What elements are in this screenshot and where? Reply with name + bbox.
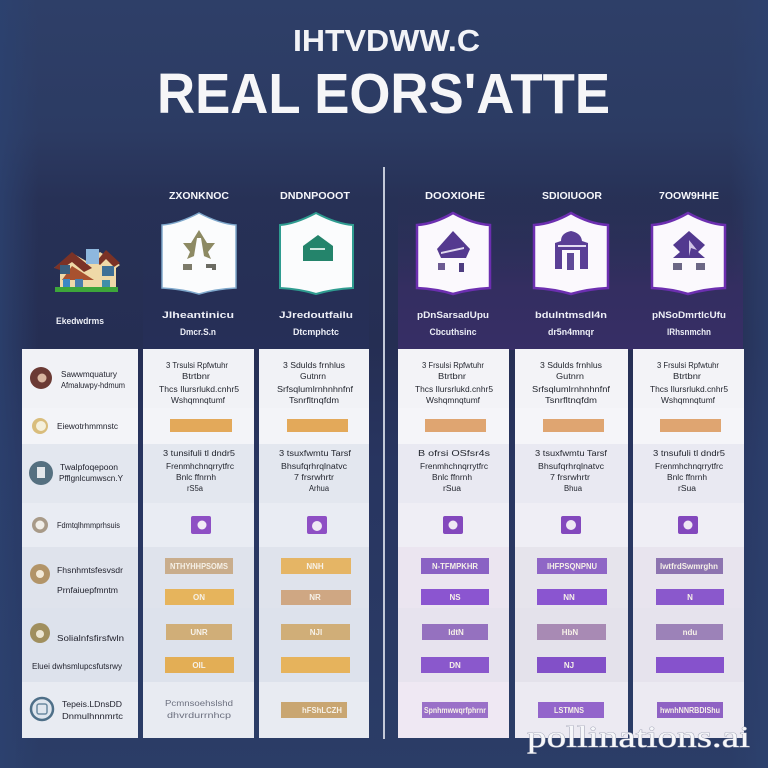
icon: purple shield temple [534, 213, 608, 294]
plan note: Dtcmphctc [293, 327, 339, 337]
row 1 text: Tsnrfltnqfdm [289, 396, 339, 405]
row 6 bars: NJI [310, 628, 322, 637]
column title: SDIOIUOOR [542, 191, 603, 202]
row 5 bars: lwtfrdSwmrghn [660, 562, 718, 571]
panel: column 4 [515, 349, 628, 738]
plan note: Cbcuthsinc [430, 327, 476, 337]
row 7 text: dhvrdurrnhcp [167, 711, 232, 720]
column 4 header [534, 191, 608, 337]
icon: house [54, 249, 120, 292]
row 2 label: Eiewotrhmmnstc [57, 422, 118, 431]
icon: row 6 [30, 623, 50, 643]
header band: left group [143, 190, 369, 350]
icon: row 4 [32, 517, 48, 533]
row 5 bars: NS [449, 593, 461, 602]
row 1 text: Tsnrfltnqfdm [545, 396, 597, 405]
row 3 text [535, 449, 608, 493]
row 2 bar [287, 419, 348, 432]
row 1 label second line: Afmaluwpy-hdmum [61, 381, 125, 390]
row 6 bars: HbN [562, 628, 578, 637]
row 1 text: Thcs Ilursrlukd.cnhr5 [650, 385, 729, 394]
row 1 label: Sawwmquatury [61, 370, 117, 379]
row 1 text: Srfsqlumlrnhnhnfnf [277, 385, 354, 394]
row 3 text: Arhua [309, 484, 330, 493]
row 3 text: rSua [443, 484, 462, 493]
row 5 bars [281, 558, 351, 605]
row 5 label second line: Prnfaiuepfmntm [57, 586, 118, 595]
row 3 text: Bnlc ffnrnh [176, 473, 216, 482]
row 1 text: Wshqmnqtumf [426, 396, 481, 405]
row 3 text: Frenmhchnqrrytfrc [655, 462, 723, 471]
icon: row 7 [31, 698, 53, 720]
row 5 bars: ON [193, 593, 205, 602]
row 1 text: 3 Sdulds frnhlus [283, 361, 345, 370]
row 7 bar [422, 702, 488, 718]
row 7 bar: hFShLCZH [302, 706, 342, 715]
row 7 label second line: Dnmulhnnmrtc [62, 712, 123, 721]
icon: row 2 [32, 418, 48, 434]
row 2 bar [660, 419, 721, 432]
row 5 bars: NR [309, 593, 321, 602]
row 3 text: Bhua [564, 484, 583, 493]
row 1 text: 3 Trsulsi Rpfwtuhr [166, 361, 228, 370]
icon: shield with star house [162, 213, 236, 294]
panel: feature labels [22, 349, 138, 738]
plan name: bdulntmsdl4n [535, 310, 607, 320]
column 5 header [652, 191, 726, 337]
row 6 bars [421, 624, 489, 673]
watermark: pollinations.ai [527, 719, 750, 754]
row 1 text: Wshqmnqtumf [661, 396, 716, 405]
row 5 bars: NNH [306, 562, 324, 571]
row 1 text: Srfsqlumlrnhnhnfnf [532, 385, 611, 394]
row 1 text [415, 361, 494, 405]
plan note: dr5n4mnqr [548, 327, 594, 337]
row 6 bars: DN [449, 661, 461, 670]
row 1 text: Gutnrn [300, 372, 326, 381]
plan name: pDnSarsadUpu [417, 310, 489, 320]
column title: 7OOW9HHE [659, 191, 719, 202]
row 4 label: Fdmtqlhmmprhsuis [57, 521, 120, 530]
row 1 text: Wshqmnqtumf [171, 396, 226, 405]
row 3 text: 3 tsuxfwmtu Tarsf [279, 449, 352, 458]
panel: column 3 [398, 349, 509, 738]
row 1 text [650, 361, 729, 405]
row 6 label: Solialnfsfirsfwln [57, 634, 124, 643]
row 1 text: Thcs Ilursrlukd.cnhr5 [415, 385, 494, 394]
row 3 label second line: Pfflgnlcumwscn.Y [59, 474, 124, 483]
row 5 bars: NN [563, 593, 575, 602]
plan name: JJredoutfailu [279, 310, 353, 320]
row 6 label second line: Eluei dwhsmlupcsfutsrwy [32, 662, 122, 671]
title block [157, 23, 610, 126]
row 3 text: rS5a [187, 484, 204, 493]
row 3 text: 7 frsrwhrtr [550, 473, 590, 482]
row 5 bars: N-TFMPKHR [432, 562, 478, 571]
panel: column 1 [143, 349, 254, 738]
row 5 label: Fhsnhmtsfesvsdr [57, 566, 123, 575]
row 3 text: 3 tunsifuli tl dndr5 [163, 449, 236, 458]
row 4 icon [191, 516, 211, 534]
row 6 bars [165, 624, 234, 673]
row 3 text: Bhsufqrhrqlnatvc [281, 462, 347, 471]
row 7 bar [657, 702, 723, 718]
plan name: pNSoDmrtlcUfu [652, 310, 726, 320]
row 1 text: Btrtbnr [438, 372, 466, 381]
row 3 text: rSua [678, 484, 697, 493]
row 1 text: 3 Frsulsi Rpfwtuhr [422, 361, 484, 370]
icon: row 5 [30, 564, 50, 584]
main title: REAL EORS'ATTE [157, 62, 610, 126]
row 1 text: 3 Sdulds frnhlus [540, 361, 602, 370]
row 7 text: Pcmnsoehslshd [165, 699, 233, 708]
row 5 bars [537, 558, 607, 605]
row 7 bar [538, 702, 604, 718]
row 6 bars: UNR [190, 628, 208, 637]
column title: DOOXIOHE [425, 191, 485, 202]
row 2 bar [543, 419, 604, 432]
row 7 text [165, 699, 233, 720]
panel: column 2 [259, 349, 369, 738]
row 1 text [532, 361, 611, 405]
icon: purple shield chevrons [652, 213, 725, 294]
row 4 icon [561, 516, 581, 534]
header band: right group [398, 190, 743, 350]
row 6 bars: NJ [564, 661, 574, 670]
row 3 text: 7 frsrwhrtr [294, 473, 334, 482]
row 3 text [279, 449, 352, 493]
column header: house label [54, 249, 120, 326]
row 1 text: 3 Frsulsi Rpfwtuhr [657, 361, 719, 370]
row 5 bars [165, 558, 234, 605]
row 5 bars [421, 558, 489, 605]
plan name: Jlheantinicu [162, 310, 234, 320]
row 7 bar: hwnhNNRBDIShu [660, 706, 720, 715]
row 3 label: Twalpfoqepoon [60, 463, 118, 472]
row 1 text: Gutnrn [556, 372, 584, 381]
column 2 header [279, 191, 353, 337]
row 4 icon [307, 516, 327, 534]
row 7 bar: Spnhmwwqrfphrnr [424, 706, 486, 715]
row 5 bars [656, 558, 724, 605]
panel: column 5 [633, 349, 744, 738]
column 1 header [162, 191, 236, 337]
row 4 icon [678, 516, 698, 534]
row 3 text: 3 tnsufuli tl dndr5 [653, 449, 726, 458]
row 3 text: Bnlc ffnrnh [432, 473, 472, 482]
row 3 text [163, 449, 236, 493]
row 1 text: Btrtbnr [673, 372, 701, 381]
row 1 text: Thcs Ilursrlukd.cnhr5 [159, 385, 240, 394]
row 5 bars: NTHYHHPSOMS [170, 562, 229, 571]
row 3 text: Bhsufqrhrqlnatvc [538, 462, 604, 471]
row 2 bar [425, 419, 486, 432]
label: Ekedwdrms [56, 316, 104, 326]
row 6 bars: OIL [192, 661, 206, 670]
plan note: Dmcr.S.n [180, 327, 216, 337]
row 5 bars: IHFPSQNPNU [547, 562, 597, 571]
subtitle: IHTVDWW.C [293, 23, 480, 58]
row 3 text: Frenmhchnqrrytfrc [166, 462, 234, 471]
column 3 header [417, 191, 490, 337]
row 3 text [418, 449, 490, 493]
row 1 text [159, 361, 240, 405]
row 3 text: 3 tsuxfwmtu Tarsf [535, 449, 608, 458]
row 6 bars [537, 624, 606, 673]
row 7 bar: LSTMNS [554, 706, 585, 715]
row 1 text: Btrtbnr [182, 372, 210, 381]
column title: DNDNPOOOT [280, 191, 350, 202]
icon: row 1 [30, 367, 52, 389]
row 7 label: Tepeis.LDnsDD [62, 700, 122, 709]
row 6 bars: IdtN [448, 628, 464, 637]
row 2 bar [170, 419, 232, 432]
row 6 bars [656, 624, 724, 673]
row 6 bars [281, 624, 350, 673]
central divider [383, 167, 385, 739]
icon: row 3 [29, 461, 53, 485]
row 3 text [653, 449, 726, 493]
row 3 text: Frenmhchnqrrytfrc [420, 462, 488, 471]
row 5 bars: N [687, 593, 693, 602]
row 3 text: Bnlc ffnrnh [667, 473, 707, 482]
row 6 bars: ndu [683, 628, 697, 637]
plan note: lRhsnmchn [667, 327, 711, 337]
row 1 text [277, 361, 354, 405]
column title: ZXONKNOC [169, 191, 229, 202]
icon: shield with teal house [280, 213, 353, 294]
row 7 bar [281, 702, 347, 718]
row 4 icon [443, 516, 463, 534]
icon: purple shield house [417, 213, 490, 294]
row 3 text: B ofrsi OSfsr4s [418, 449, 490, 458]
